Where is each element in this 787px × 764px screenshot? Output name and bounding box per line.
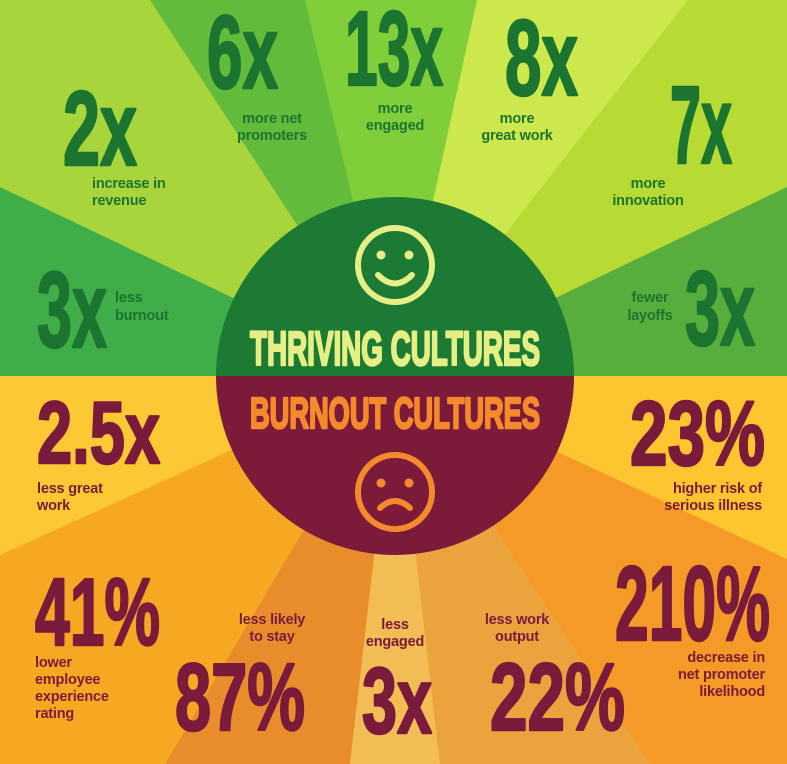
stat: 3x less engaged: less bbox=[381, 617, 409, 633]
stat: 3x less burnout: less bbox=[115, 290, 143, 306]
stat: 8x more great work: great work bbox=[481, 128, 554, 144]
stat: 7x more innovation: innovation bbox=[612, 193, 684, 209]
panel: central circle burnout half bbox=[216, 376, 574, 555]
stat: 2x increase in revenue: increase in bbox=[92, 176, 166, 192]
stat: 23% higher risk of serious illness: serious illness bbox=[664, 498, 762, 514]
stat: 87% less likely to stay: less likely bbox=[239, 612, 305, 628]
stat: 3x less engaged bbox=[362, 617, 432, 753]
stat: 210% decrease in net promoter likelihood: likelihood bbox=[699, 684, 765, 700]
stat: 13x more engaged: engaged bbox=[366, 118, 424, 134]
stat: 41% lower employee experience rating: lower bbox=[35, 655, 72, 671]
stat: 8x more great work: 8x bbox=[505, 0, 578, 118]
stat: 6x more net promoters bbox=[207, 0, 307, 144]
stat: 23% higher risk of serious illness: higher risk of bbox=[673, 481, 762, 497]
stat: 41% lower employee experience rating: 41% bbox=[35, 559, 160, 666]
stat: 6x more net promoters: promoters bbox=[237, 128, 307, 144]
stat: 13x more engaged bbox=[345, 0, 443, 134]
stat: 87% less likely to stay bbox=[175, 612, 305, 751]
panel: central circle thriving half bbox=[216, 197, 574, 376]
stat: 3x less burnout: 3x bbox=[37, 249, 107, 370]
icon: smiley face bbox=[358, 228, 432, 302]
stat: 2.5x less great work: work bbox=[36, 498, 71, 514]
stat: 23% higher risk of serious illness bbox=[630, 383, 765, 514]
stat: 8x more great work: more bbox=[500, 111, 534, 127]
stat: 6x more net promoters: more net bbox=[242, 111, 302, 127]
stat: 2x increase in revenue: revenue bbox=[92, 193, 146, 209]
stat: 3x fewer layoffs bbox=[627, 250, 755, 368]
stat: 3x less engaged: 3x bbox=[362, 648, 432, 753]
stat: 41% lower employee experience rating: rating bbox=[35, 706, 74, 722]
stat: 22% less work output bbox=[485, 612, 625, 751]
panel: thriving wedges background bbox=[0, 0, 787, 376]
heading: burnout cultures: BURNOUT CULTURES bbox=[250, 389, 540, 438]
stat: 2.5x less great work: 2.5x bbox=[37, 383, 160, 482]
panel: burnout wedges background bbox=[0, 376, 787, 764]
stat: 13x more engaged: more bbox=[378, 101, 412, 117]
stat: 87% less likely to stay: to stay bbox=[249, 629, 295, 645]
stat: 8x more great work bbox=[481, 0, 578, 144]
stat: 22% less work output: less work bbox=[485, 612, 550, 628]
stat: 22% less work output: output bbox=[495, 629, 539, 645]
heading: thriving cultures: THRIVING CULTURES bbox=[250, 323, 540, 376]
stat: 41% lower employee experience rating: experience bbox=[35, 689, 109, 705]
stat: 3x less engaged: engaged bbox=[366, 634, 424, 650]
stat: 2.5x less great work: less great bbox=[37, 481, 103, 497]
stat: 210% decrease in net promoter likelihood: decrease in bbox=[687, 650, 765, 666]
stat: 87% less likely to stay: 87% bbox=[175, 644, 305, 751]
stat: 41% lower employee experience rating: employee bbox=[35, 672, 100, 688]
stat: 7x more innovation bbox=[612, 64, 732, 209]
icon: sad face bbox=[358, 455, 432, 529]
stat: 2.5x less great work bbox=[36, 383, 160, 514]
stat: 3x fewer layoffs: layoffs bbox=[627, 308, 673, 324]
stat: 2x increase in revenue: 2x bbox=[63, 70, 137, 188]
stat: 3x less burnout: burnout bbox=[115, 308, 169, 324]
stat: 210% decrease in net promoter likelihood: net promoter bbox=[678, 667, 766, 683]
stat: 22% less work output: 22% bbox=[490, 644, 625, 751]
stat: 41% lower employee experience rating bbox=[35, 559, 160, 722]
stat: 7x more innovation: more bbox=[631, 176, 665, 192]
stat: 3x fewer layoffs: fewer bbox=[632, 290, 669, 306]
